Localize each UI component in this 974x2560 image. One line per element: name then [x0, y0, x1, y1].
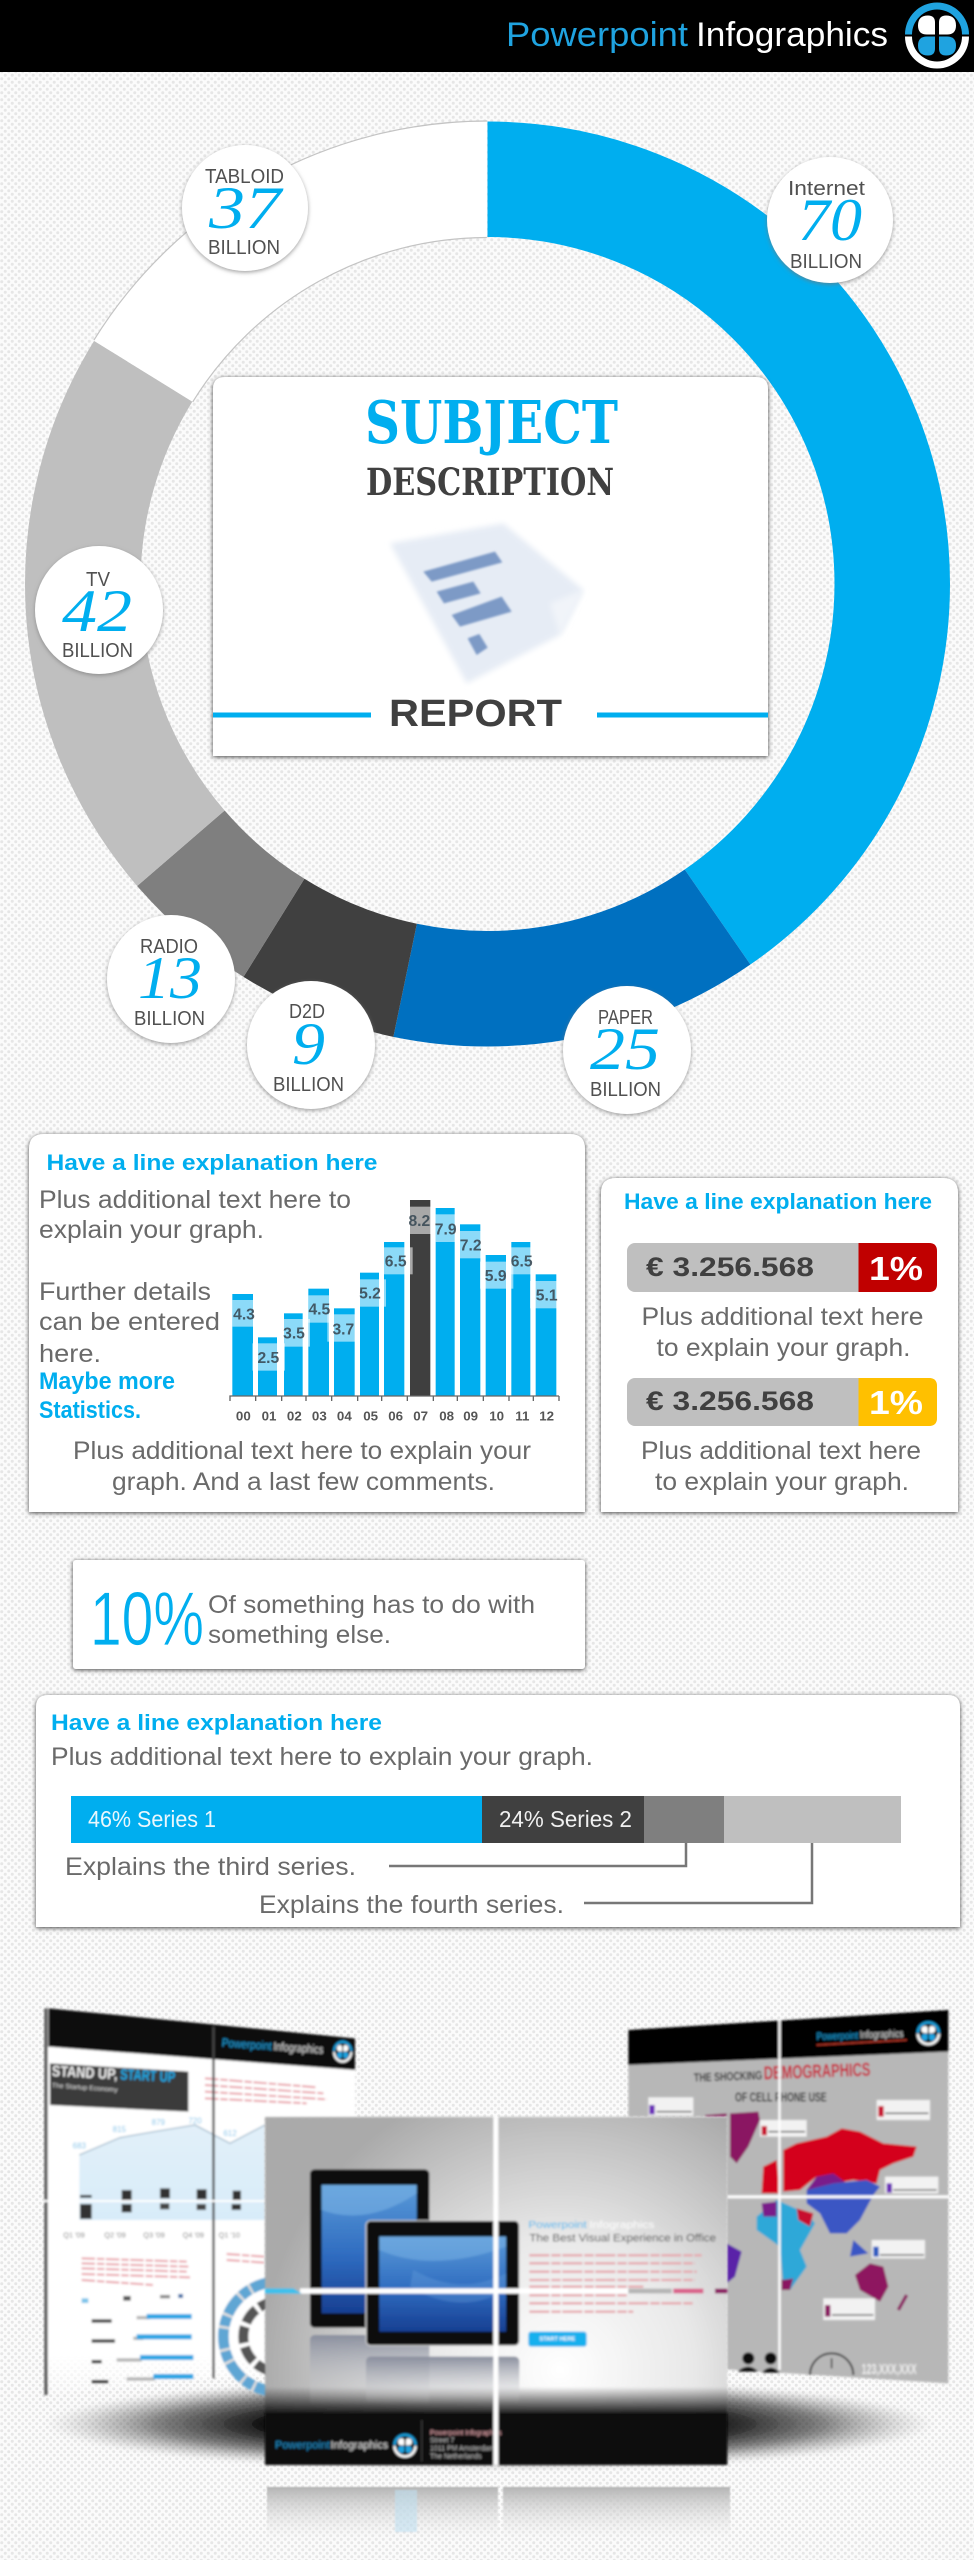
footnote text: graph. And a last few comments. — [112, 1468, 495, 1496]
screenshot: left page — [43, 2008, 355, 2395]
tablet reflections — [310, 2335, 429, 2405]
bar chart: 04 — [337, 1409, 352, 1424]
bar chart: 5.1 — [536, 1287, 558, 1304]
bar chart: 3.7 — [332, 1322, 355, 1339]
screenshot: center page: Infographics — [331, 2439, 388, 2451]
screenshot: left page: 612 — [223, 2129, 237, 2138]
intro text: explain your graph. — [39, 1216, 264, 1244]
further details text: here. — [39, 1340, 101, 1368]
bar chart: 12 — [539, 1409, 554, 1424]
bar chart: 07 — [413, 1409, 428, 1424]
bar chart: 3.5 — [283, 1326, 305, 1343]
text: Plus additional text here — [641, 1437, 921, 1465]
screenshot: left page: Infographics — [273, 2039, 324, 2057]
bubble: tv: BILLION — [62, 640, 133, 662]
screenshot: left page: The Startup Economy — [52, 2082, 119, 2094]
report label — [213, 693, 768, 735]
price bar: red — [627, 1243, 937, 1292]
bar chart: 6.5 — [385, 1253, 407, 1270]
floor shadow — [45, 2378, 935, 2470]
screenshot: right page: OF CELL PHONE USE — [735, 2091, 827, 2105]
bar chart: 8.2 — [408, 1213, 431, 1230]
series three note: Explains the third series. — [65, 1853, 356, 1881]
screenshot: center page: Powerpoint Infographics — [430, 2430, 502, 2437]
heading: Have a line explanation here — [51, 1710, 382, 1735]
screenshot: left page: Powerpoint — [221, 2036, 273, 2053]
highlight text: Maybe more — [39, 1368, 175, 1395]
screenshot: center page: 1011 PM Amsterdam — [430, 2445, 495, 2452]
bubble: radio — [107, 915, 235, 1043]
bubble: tabloid: TABLOID — [205, 166, 284, 188]
bar chart: 08 — [439, 1409, 454, 1424]
bubble: internet: BILLION — [790, 251, 862, 273]
stacked bar: 46% Series 1 — [88, 1806, 216, 1832]
panel: price card — [601, 1178, 958, 1512]
bubble: internet — [767, 157, 893, 283]
title: subject: SUBJECT — [365, 388, 618, 457]
donut chart — [24, 121, 950, 1047]
panel: subject card — [213, 377, 768, 756]
price bar: yellow: 1% — [869, 1384, 923, 1421]
bar chart — [229, 1200, 559, 1424]
screenshot: left page: 815 — [113, 2125, 127, 2134]
screenshot: left page: START UP — [120, 2066, 176, 2086]
intro text: Plus additional text here to — [39, 1186, 351, 1214]
series three note — [65, 1843, 686, 1881]
text — [641, 1437, 921, 1496]
bar chart: 05 — [363, 1409, 379, 1424]
bar chart: 00 — [236, 1409, 251, 1424]
bubble: d2d: 9 — [292, 1011, 325, 1077]
bar chart: 01 — [262, 1409, 277, 1424]
bubble: paper: 25 — [590, 1016, 660, 1082]
screenshot: center page: The Best Visual Experience in Office — [529, 2232, 716, 2244]
text: Plus additional text here to explain your graph. — [51, 1743, 593, 1771]
stacked bar — [71, 1796, 901, 1843]
bar chart: 7.9 — [435, 1221, 457, 1238]
callout text: Of something has to do with — [208, 1591, 535, 1619]
callout text: something else. — [208, 1621, 391, 1649]
screenshot: right page: THE SHOCKING — [694, 2068, 762, 2085]
highlight text — [39, 1368, 175, 1424]
screenshot: center page: Infographics — [589, 2220, 654, 2231]
bubble: d2d: BILLION — [273, 1074, 344, 1096]
bubble: tv: 42 — [62, 578, 132, 644]
bar chart: 6.5 — [511, 1253, 533, 1270]
text: to explain your graph. — [655, 1468, 909, 1496]
bar chart: 10 — [489, 1409, 504, 1424]
bubble: tabloid — [182, 145, 308, 271]
tablets — [310, 2169, 429, 2328]
white bands — [493, 2117, 498, 2465]
brand name — [506, 16, 888, 54]
screenshot: right page: DEMOGRAPHICS — [763, 2059, 871, 2083]
bubble: tv: TV — [86, 569, 111, 591]
bubble: internet: Internet — [788, 178, 865, 200]
bar chart: 4.3 — [233, 1306, 255, 1323]
bubble: paper: PAPER — [598, 1007, 653, 1029]
bubble: tv — [35, 546, 163, 674]
bar chart: 5.2 — [359, 1286, 381, 1303]
price bar: red: € 3.256.568 — [646, 1252, 814, 1282]
text: to explain your graph. — [656, 1334, 910, 1362]
price bar: red: 1% — [869, 1250, 923, 1287]
bar chart: 4.5 — [308, 1302, 331, 1319]
screenshot: center page: START HERE — [539, 2337, 575, 2343]
brand name: Infographics — [696, 16, 888, 54]
screenshot: center page — [265, 2117, 727, 2465]
screenshot: right page — [628, 2010, 948, 2383]
highlight text: Statistics. — [39, 1397, 141, 1424]
series four note: Explains the fourth series. — [259, 1891, 564, 1919]
brand name: Powerpoint — [506, 16, 689, 54]
subtitle: description: DESCRIPTION — [366, 460, 614, 504]
bubble: tabloid: 37 — [208, 175, 285, 241]
text — [642, 1303, 924, 1362]
bar chart: 02 — [287, 1409, 302, 1424]
bar chart: 06 — [388, 1409, 403, 1424]
bar chart: 03 — [312, 1409, 327, 1424]
screenshot: center page: The Netherlands — [430, 2453, 482, 2460]
bubble: radio: 13 — [138, 945, 202, 1011]
heading: Have a line explanation here — [624, 1189, 932, 1214]
intro text — [39, 1186, 351, 1244]
further details text: can be entered — [39, 1308, 220, 1336]
reflection of center page — [267, 2487, 730, 2542]
footnote text: Plus additional text here to explain your — [73, 1437, 531, 1465]
screenshot: left page: Q3 '09 — [143, 2230, 165, 2239]
bar chart: 09 — [463, 1409, 478, 1424]
screenshot: left page: Q1 '09 — [63, 2230, 85, 2239]
price bar: yellow — [627, 1378, 937, 1426]
header bar — [0, 0, 974, 72]
callout text — [208, 1591, 535, 1649]
stacked bar: 24% Series 2 — [499, 1806, 632, 1832]
bubble: tabloid: BILLION — [208, 237, 280, 259]
icon: report document — [390, 523, 583, 683]
bar chart: 11 — [515, 1409, 530, 1424]
bar chart: 5.9 — [485, 1268, 507, 1285]
screenshot: center page: Street 7 — [430, 2437, 455, 2444]
screenshot: left page: 683 — [73, 2141, 87, 2150]
promo text: Powerpoint — [528, 2220, 587, 2231]
bubble: internet: 70 — [798, 187, 862, 253]
bubble: d2d: D2D — [289, 1001, 325, 1023]
screenshot: right page: 123,XXX,XXX — [862, 2362, 917, 2378]
report label: REPORT — [389, 693, 562, 735]
screenshot: left page: Q1 '10 — [219, 2230, 240, 2239]
screenshot: left page: Q4 '09 — [183, 2230, 204, 2239]
footer text: Powerpoint — [275, 2439, 330, 2451]
heading: Have a line explanation here — [46, 1150, 378, 1175]
series four note — [259, 1843, 812, 1919]
screenshot: left page: 879 — [152, 2118, 166, 2127]
bar chart: 2.5 — [257, 1350, 280, 1367]
icon: logo — [905, 2, 969, 68]
screenshot: left page: 720 — [188, 2116, 202, 2125]
screenshot: left page: STAND UP, — [51, 2063, 118, 2083]
screenshot: right page: Powerpoint — [816, 2030, 858, 2043]
big number: 10% — [90, 1577, 204, 1662]
price bar: yellow: € 3.256.568 — [646, 1386, 814, 1416]
further details text — [39, 1278, 220, 1368]
further details text: Further details — [39, 1278, 211, 1306]
bubble: radio: BILLION — [134, 1008, 205, 1030]
panel: stacked bar card — [36, 1695, 960, 1927]
panel: ten percent callout — [73, 1560, 585, 1669]
text: Plus additional text here — [642, 1303, 924, 1331]
panel: bar chart card — [29, 1134, 585, 1512]
footnote text — [73, 1437, 531, 1496]
bubble: radio: RADIO — [140, 936, 198, 958]
bubble: paper — [563, 986, 691, 1114]
screenshot: right page: Infographics — [860, 2028, 903, 2041]
bubble: d2d — [247, 981, 375, 1109]
bubble: paper: BILLION — [590, 1079, 661, 1101]
screenshot: left page: Q2 '09 — [104, 2230, 126, 2239]
bar chart: 7.2 — [460, 1237, 482, 1254]
